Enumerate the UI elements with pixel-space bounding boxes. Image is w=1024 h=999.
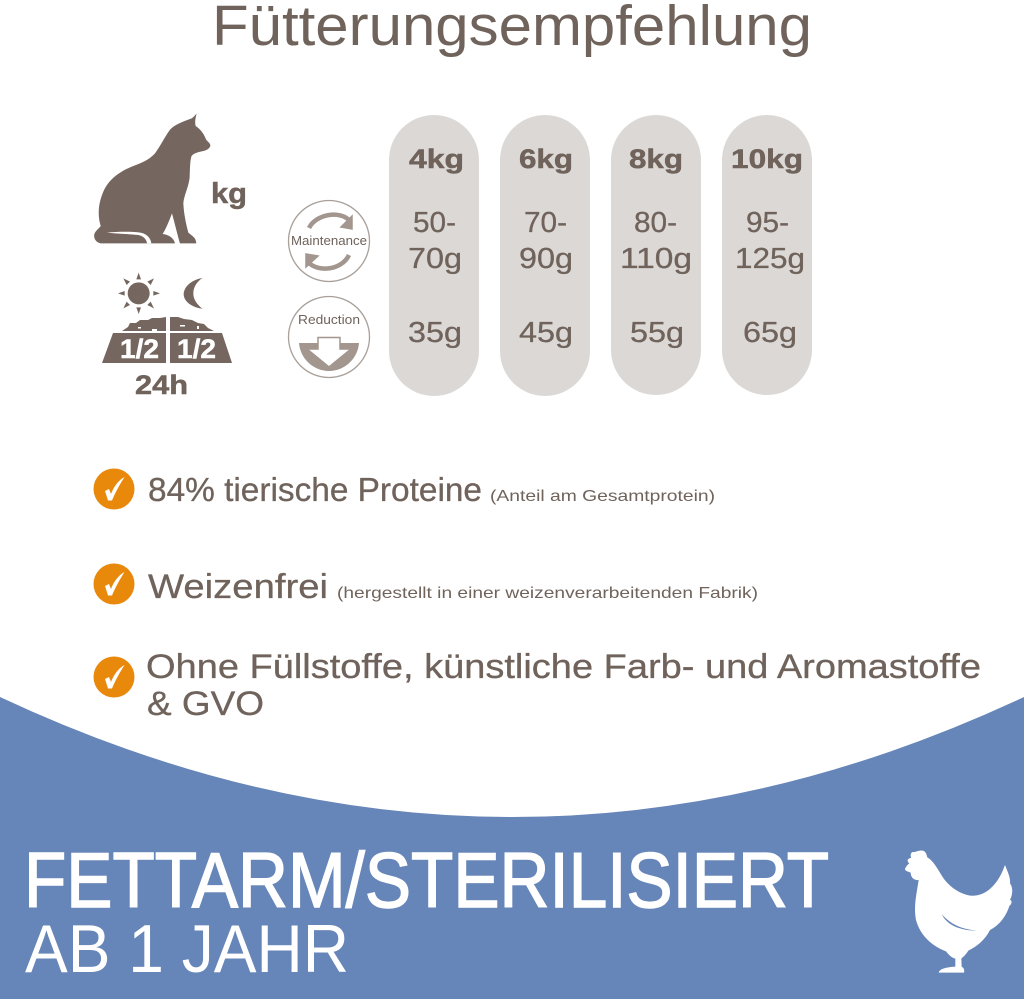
icon: sun and moon over bowl: 1/2 [120, 334, 159, 364]
panel: 6kg column: 90g [519, 243, 573, 275]
footer subheading: AB 1 JAHR [25, 911, 349, 987]
benefit: animal proteins: (Anteil am Gesamtprotein) [490, 488, 715, 505]
panel: 10kg column [722, 115, 812, 395]
icon: reduction circle: Reduction [298, 313, 360, 327]
icon: sitting cat with kg label [94, 113, 247, 243]
panel: 4kg column: 4kg [409, 144, 464, 174]
panel: blue curved footer [0, 697, 1024, 999]
panel: 6kg column [500, 115, 590, 396]
panel: 4kg column [389, 115, 479, 396]
panel: 8kg column: 8kg [629, 144, 683, 174]
icon: reduction circle [288, 296, 370, 378]
benefit: animal proteins [94, 468, 715, 510]
benefit: no fillers [94, 648, 981, 723]
panel: 8kg column: 110g [620, 243, 692, 275]
panel: 6kg column: 6kg [519, 144, 573, 174]
panel: 4kg column: 50- [413, 207, 456, 239]
icon: maintenance circle: Maintenance [291, 234, 367, 248]
panel: 8kg column: 55g [630, 317, 684, 349]
panel: 6kg column: 70- [524, 207, 567, 239]
panel: 8kg column [611, 115, 701, 395]
panel: 10kg column: 10kg [731, 144, 803, 174]
icon: sitting cat with kg label: kg [211, 178, 247, 210]
panel: 6kg column: 45g [519, 317, 573, 349]
icon: white hen [905, 851, 1012, 973]
footer heading: FETTARM/STERILISIERT [24, 836, 829, 924]
icon: sun and moon over bowl: 24h [135, 370, 188, 400]
benefit: wheat free: (hergestellt in einer weizenverarbeitenden Fabrik) [337, 585, 758, 602]
icon: sun and moon over bowl: 1/2 [177, 334, 216, 364]
panel: 10kg column: 125g [735, 243, 805, 275]
panel: 8kg column: 80- [634, 207, 677, 239]
panel: 4kg column: 70g [408, 243, 462, 275]
benefit: wheat free: Weizenfrei [148, 568, 328, 606]
benefit: no fillers: Ohne Füllstoffe, künstliche Farb- und Aromastoffe [146, 648, 981, 686]
benefit: no fillers: & GVO [147, 685, 264, 723]
icon: sun and moon over bowl [102, 273, 232, 400]
benefit: animal proteins: 84% tierische Proteine [148, 471, 482, 508]
benefit: wheat free [94, 564, 758, 606]
panel: 10kg column: 65g [743, 317, 797, 349]
panel: 4kg column: 35g [408, 317, 462, 349]
panel: 10kg column: 95- [746, 207, 789, 239]
icon: maintenance circle [288, 200, 370, 282]
